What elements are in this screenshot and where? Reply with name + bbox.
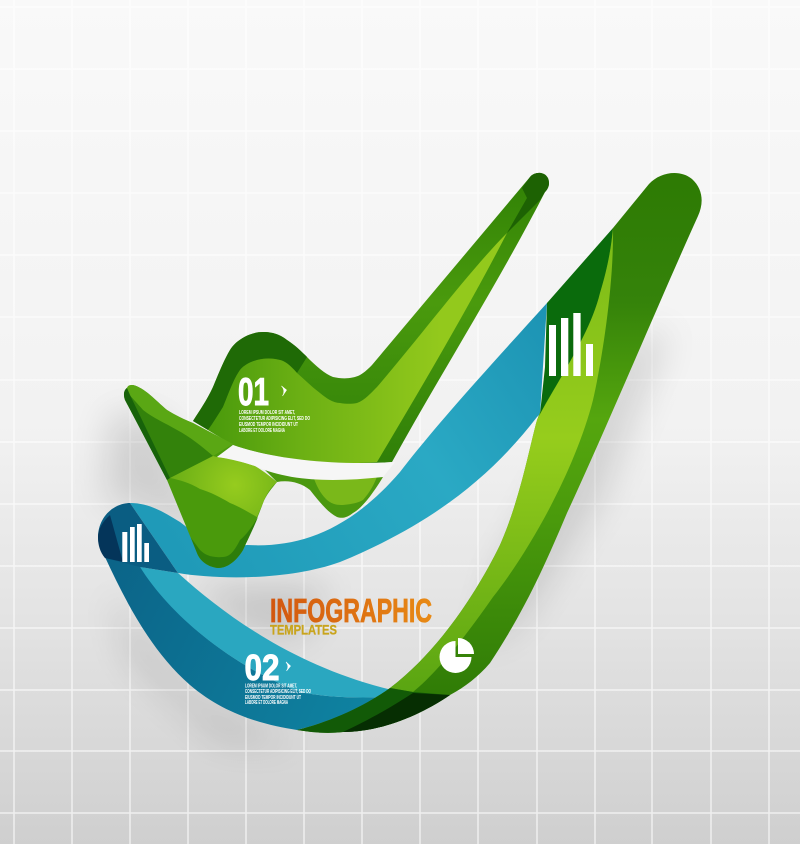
- big green ribbon: [297, 173, 702, 733]
- chevron: [282, 386, 286, 396]
- left wing, dark facet: [127, 392, 213, 478]
- lorem text 01: CONSECTETUR ADIPISICING ELIT, SED DO: [239, 416, 310, 422]
- darkest lower overlap: [343, 693, 450, 732]
- lower blue band, teal: [105, 557, 390, 730]
- left wing base: [124, 385, 277, 568]
- lorem text 02: LOREM IPSUM DOLOR SIT AMET,: [245, 684, 297, 690]
- label 01: 01: [238, 371, 269, 414]
- tip of check mark: [507, 173, 549, 233]
- lorem text 02: EIUSMOD TEMPOR INCIDIDUNT UT: [245, 695, 302, 701]
- lorem text 02: [245, 684, 311, 706]
- blue ribbon: [98, 303, 547, 730]
- label 02: 02: [244, 647, 280, 688]
- lorem text 02: LABORE ET DOLORE MAGNA: [245, 700, 288, 706]
- upper body, dark hump: [193, 332, 307, 430]
- left wing, upper light band: [127, 385, 233, 456]
- dark green facet behind bars: [540, 228, 613, 414]
- title: [270, 592, 432, 638]
- lower blue band, light cyan: [140, 567, 392, 697]
- lorem text 01: LOREM IPSUM DOLOR SIT AMET,: [239, 410, 295, 416]
- title: INFOGRAPHIC: [270, 592, 432, 629]
- ribbon base: [297, 173, 702, 733]
- left wing, bottom rim: [191, 517, 258, 568]
- lorem text 01: [239, 410, 310, 434]
- lower lobe: [260, 465, 383, 518]
- icon: large bar chart: [549, 313, 593, 376]
- lower lobe, bright centre: [313, 474, 378, 505]
- soft shadows: [105, 330, 670, 745]
- lorem text 01: EIUSMOD TEMPOR INCIDIDUNT UT: [239, 422, 298, 428]
- lorem text 02: CONSECTETUR ADIPISICING ELIT, SED DO: [245, 689, 311, 695]
- upper blue band: [130, 303, 547, 577]
- bright green stripe: [390, 228, 613, 692]
- subtitle: TEMPLATES: [270, 622, 337, 638]
- icon: pie chart: [440, 638, 474, 673]
- lorem text 01: LABORE ET DOLORE MAGNA: [239, 428, 285, 434]
- chevron: [286, 662, 290, 671]
- upper body base: [193, 173, 549, 464]
- dark green lower overlap: [297, 688, 450, 733]
- left wing, darkest sliver: [124, 388, 170, 480]
- icon: small bar chart: [122, 524, 149, 562]
- white swoosh band: [217, 445, 395, 480]
- blue end cap, darkest: [98, 515, 123, 562]
- left wing, bright centre: [170, 456, 277, 517]
- blue end cap, dark: [98, 503, 178, 573]
- green check mark: [124, 173, 549, 568]
- upper body, bright green: [208, 233, 507, 463]
